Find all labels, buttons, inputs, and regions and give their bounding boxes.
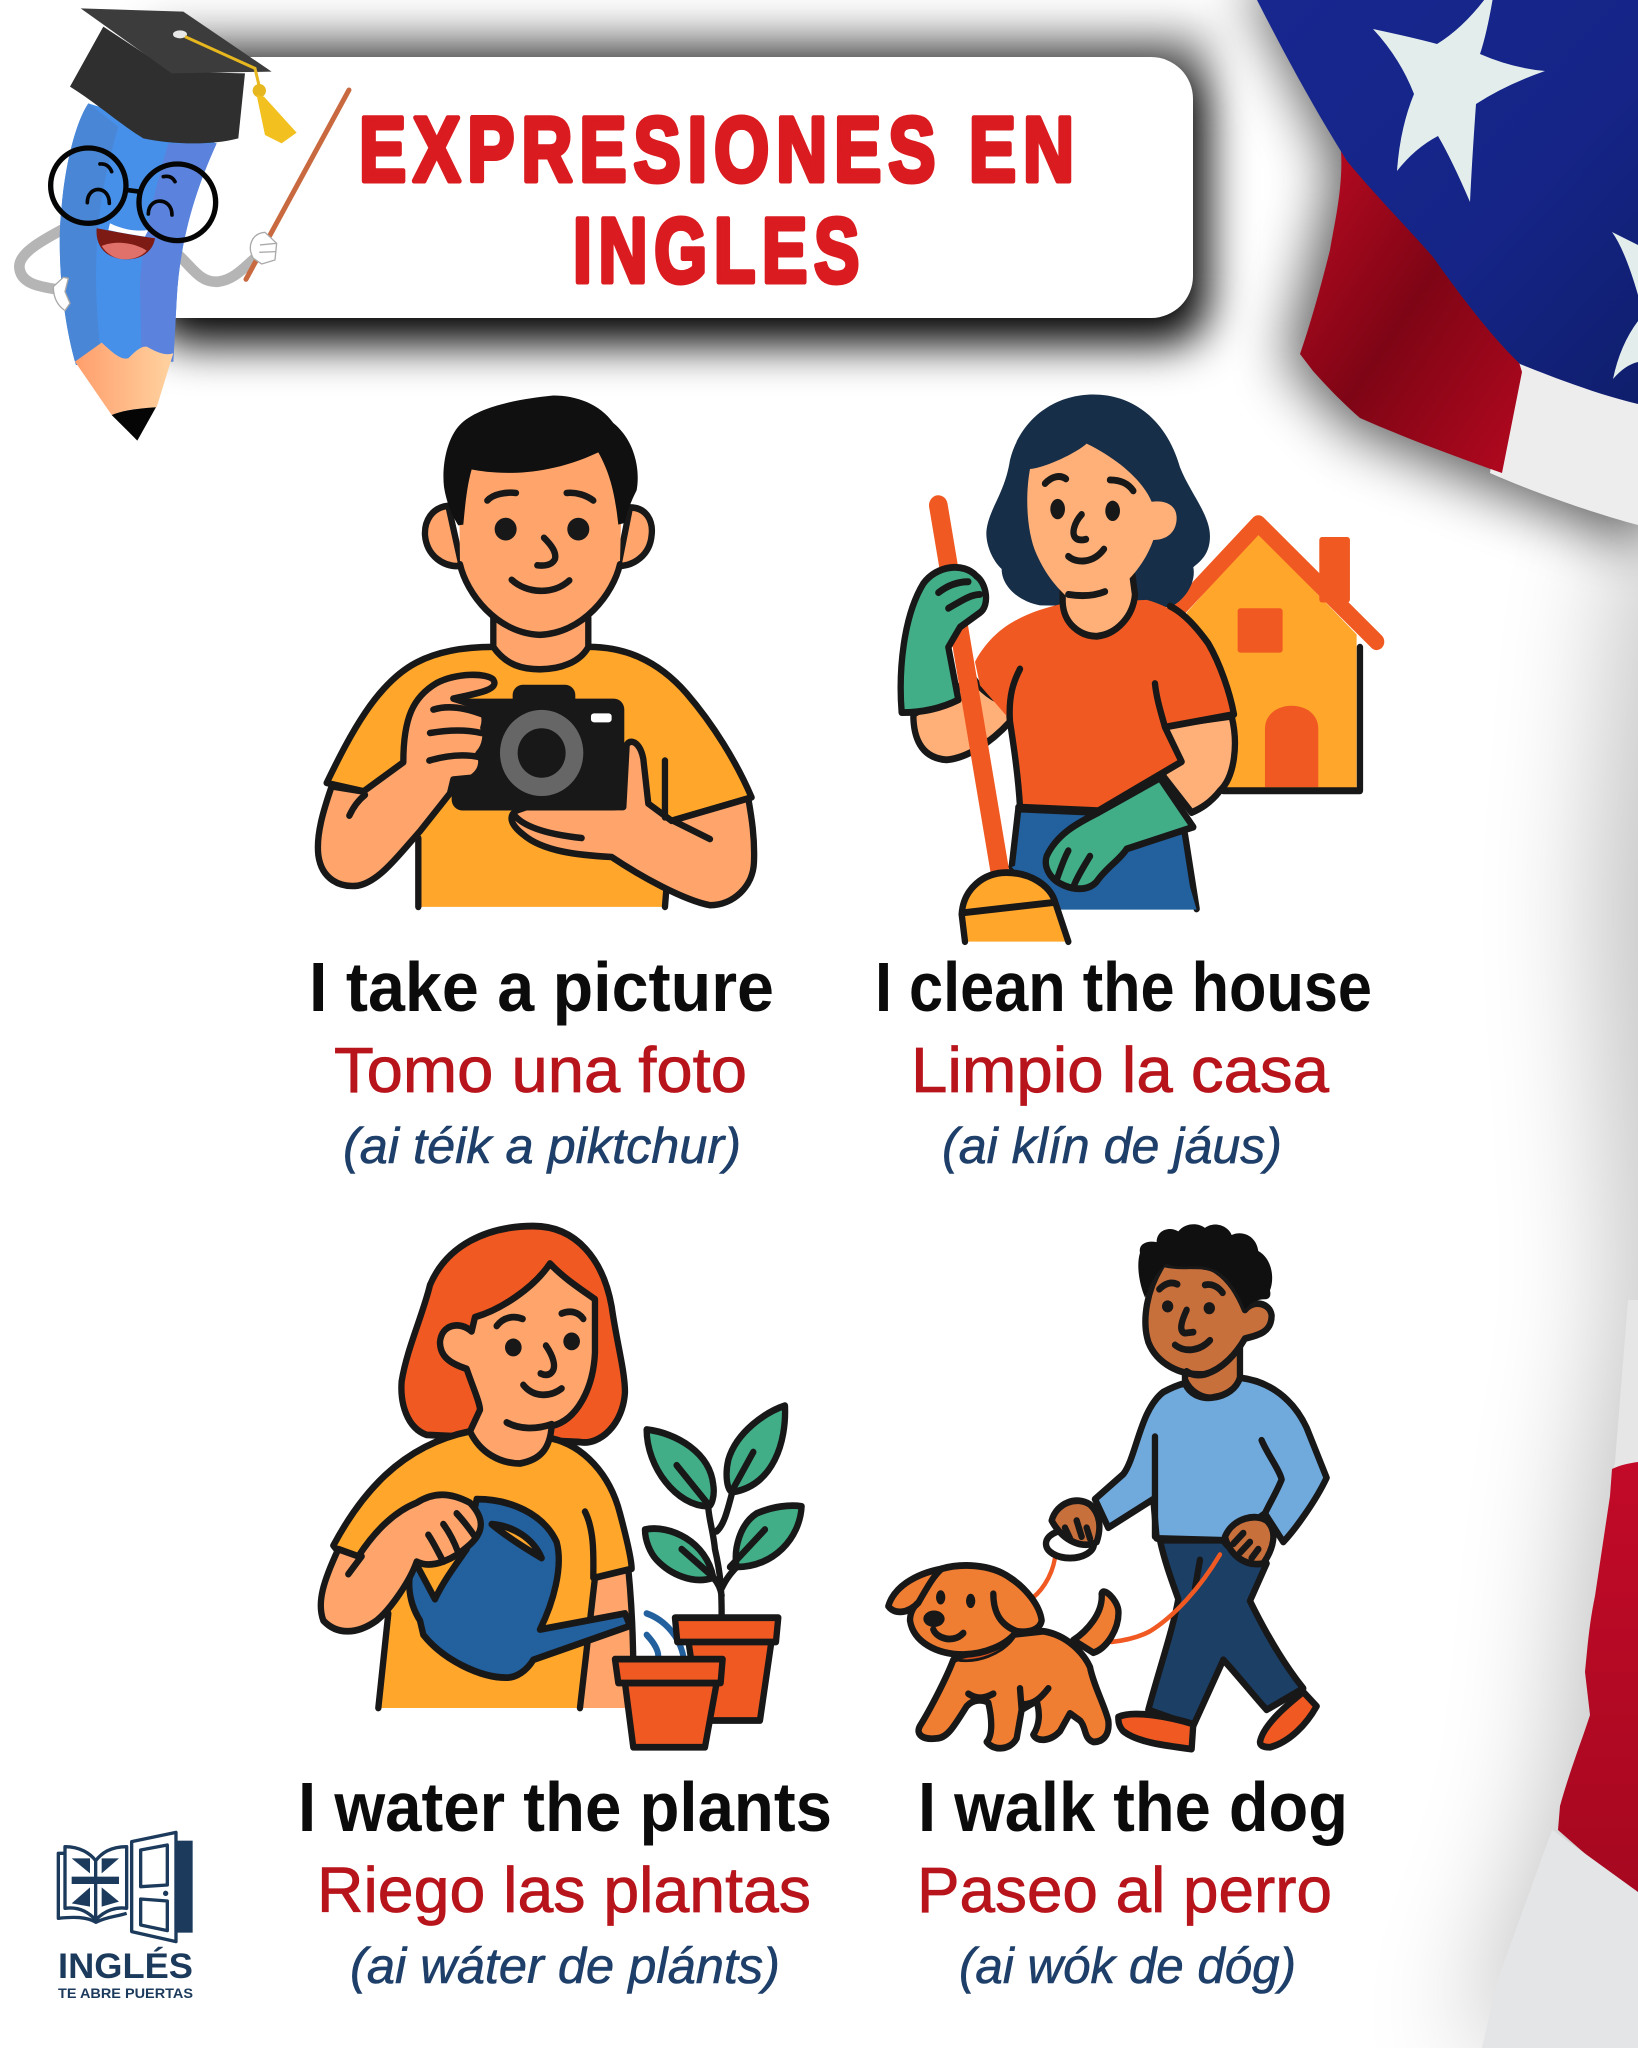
facial features <box>1159 1283 1223 1375</box>
caption: I walk the dog: (ai wók de dóg) <box>959 1938 1296 1994</box>
face <box>1145 1264 1272 1374</box>
caption: I walk the dog: Paseo al perro <box>917 1854 1332 1926</box>
arm holding can <box>321 1495 481 1631</box>
neck <box>1185 1346 1240 1398</box>
leaves <box>645 1406 802 1580</box>
shirt <box>333 1431 632 1708</box>
flag shadow top right <box>1245 0 1638 545</box>
right arm <box>582 1569 633 1708</box>
shirt <box>975 600 1234 811</box>
right arm <box>1163 716 1235 813</box>
ears <box>425 506 652 566</box>
neck <box>493 618 588 669</box>
face <box>458 439 623 635</box>
logo: inglés te abre puertas <box>58 1832 193 2001</box>
trousers <box>1012 778 1197 909</box>
flag bottom right <box>1482 1300 1638 2048</box>
illustration: woman watering the plants <box>321 1226 802 1747</box>
left arm behind <box>913 678 1010 760</box>
title banner <box>120 57 1193 318</box>
right arm and hand <box>512 742 754 905</box>
icon: star 3 <box>1613 321 1638 379</box>
caption: I walk the dog: I walk the dog <box>918 1768 1348 1846</box>
title <box>359 99 1081 302</box>
leash handle <box>1046 1530 1094 1558</box>
neck and face <box>440 1264 595 1463</box>
caption: I clean the house: I clean the house <box>875 948 1372 1026</box>
watering can <box>409 1499 630 1678</box>
title: INGLES <box>573 200 866 302</box>
mascot pointer <box>246 90 349 279</box>
pencil mascot <box>19 8 349 441</box>
caption: I take a picture: (ai téik a piktchur) <box>343 1118 741 1174</box>
left glove <box>901 567 986 713</box>
face <box>1027 444 1177 598</box>
hair <box>443 395 638 525</box>
icon: star 2 <box>1612 232 1638 295</box>
graduation cap <box>70 8 297 143</box>
illustration: woman cleaning the house <box>901 395 1377 942</box>
logo wordmark <box>58 1946 193 2001</box>
trousers <box>1148 1540 1303 1726</box>
logo wordmark: INGLÉS <box>58 1946 193 1986</box>
pencil lead <box>112 407 156 441</box>
caption: I take a picture: Tomo una foto <box>334 1034 747 1106</box>
right hand <box>1225 1517 1273 1564</box>
dog tail <box>1073 1592 1118 1653</box>
banner top shadow <box>150 30 1208 80</box>
caption: I take a picture <box>309 948 774 1174</box>
dog body <box>919 1631 1109 1748</box>
glasses and eyes <box>51 148 216 241</box>
broom handle <box>938 505 1001 876</box>
front pot <box>615 1659 723 1747</box>
shirt <box>327 647 752 907</box>
caption: I clean the house: (ai klín de jáus) <box>942 1118 1282 1174</box>
flag top right <box>1257 0 1638 525</box>
facial features <box>497 1312 593 1578</box>
icon: open door <box>132 1832 193 1942</box>
caption: I water the plants <box>298 1768 832 1994</box>
mascot arms <box>19 230 255 289</box>
water drops <box>647 1613 683 1656</box>
back pot <box>675 1618 778 1721</box>
lower glove <box>1046 778 1193 889</box>
caption: I water the plants: I water the plants <box>298 1768 832 1846</box>
dog face <box>918 1569 1048 1710</box>
plant <box>645 1406 802 1615</box>
dog head <box>888 1565 1042 1654</box>
mascot hands <box>53 232 277 311</box>
left hand <box>1052 1501 1099 1545</box>
title: EXPRESIONES EN <box>359 99 1081 201</box>
illustration: man walking the dog <box>888 1224 1327 1749</box>
dog collar <box>953 1633 1013 1661</box>
sweater <box>1095 1378 1327 1542</box>
creases <box>349 707 710 839</box>
caption: I clean the house <box>875 948 1372 1174</box>
caption: I water the plants: (ai wáter de plánts) <box>350 1938 780 1994</box>
right edge flag shadow <box>1470 430 1638 2048</box>
hair <box>1138 1224 1272 1310</box>
logo wordmark: TE ABRE PUERTAS <box>58 1985 193 2001</box>
hair <box>401 1226 625 1442</box>
facial features <box>487 493 593 591</box>
shoes <box>1118 1692 1317 1749</box>
neck <box>1063 574 1135 636</box>
banner shadow <box>150 62 1208 344</box>
left arm and hand <box>318 675 494 886</box>
dog <box>888 1565 1118 1748</box>
illustration: man taking a picture <box>318 395 754 907</box>
camera <box>452 685 624 810</box>
icon: star 1 <box>1373 0 1545 202</box>
caption: I water the plants: Riego las plantas <box>317 1854 811 1926</box>
pencil body <box>60 103 217 441</box>
caption: I take a picture: I take a picture <box>309 948 774 1026</box>
hair <box>986 395 1210 607</box>
icon: open book with union flag <box>58 1832 193 1942</box>
pencil wood <box>75 343 173 415</box>
house <box>1175 524 1377 791</box>
mouth <box>97 223 155 259</box>
caption: I clean the house: Limpio la casa <box>911 1034 1329 1106</box>
broom head <box>962 873 1068 942</box>
leash <box>1028 1555 1220 1642</box>
caption: I walk the dog <box>917 1768 1348 1994</box>
facial features <box>1045 477 1133 596</box>
